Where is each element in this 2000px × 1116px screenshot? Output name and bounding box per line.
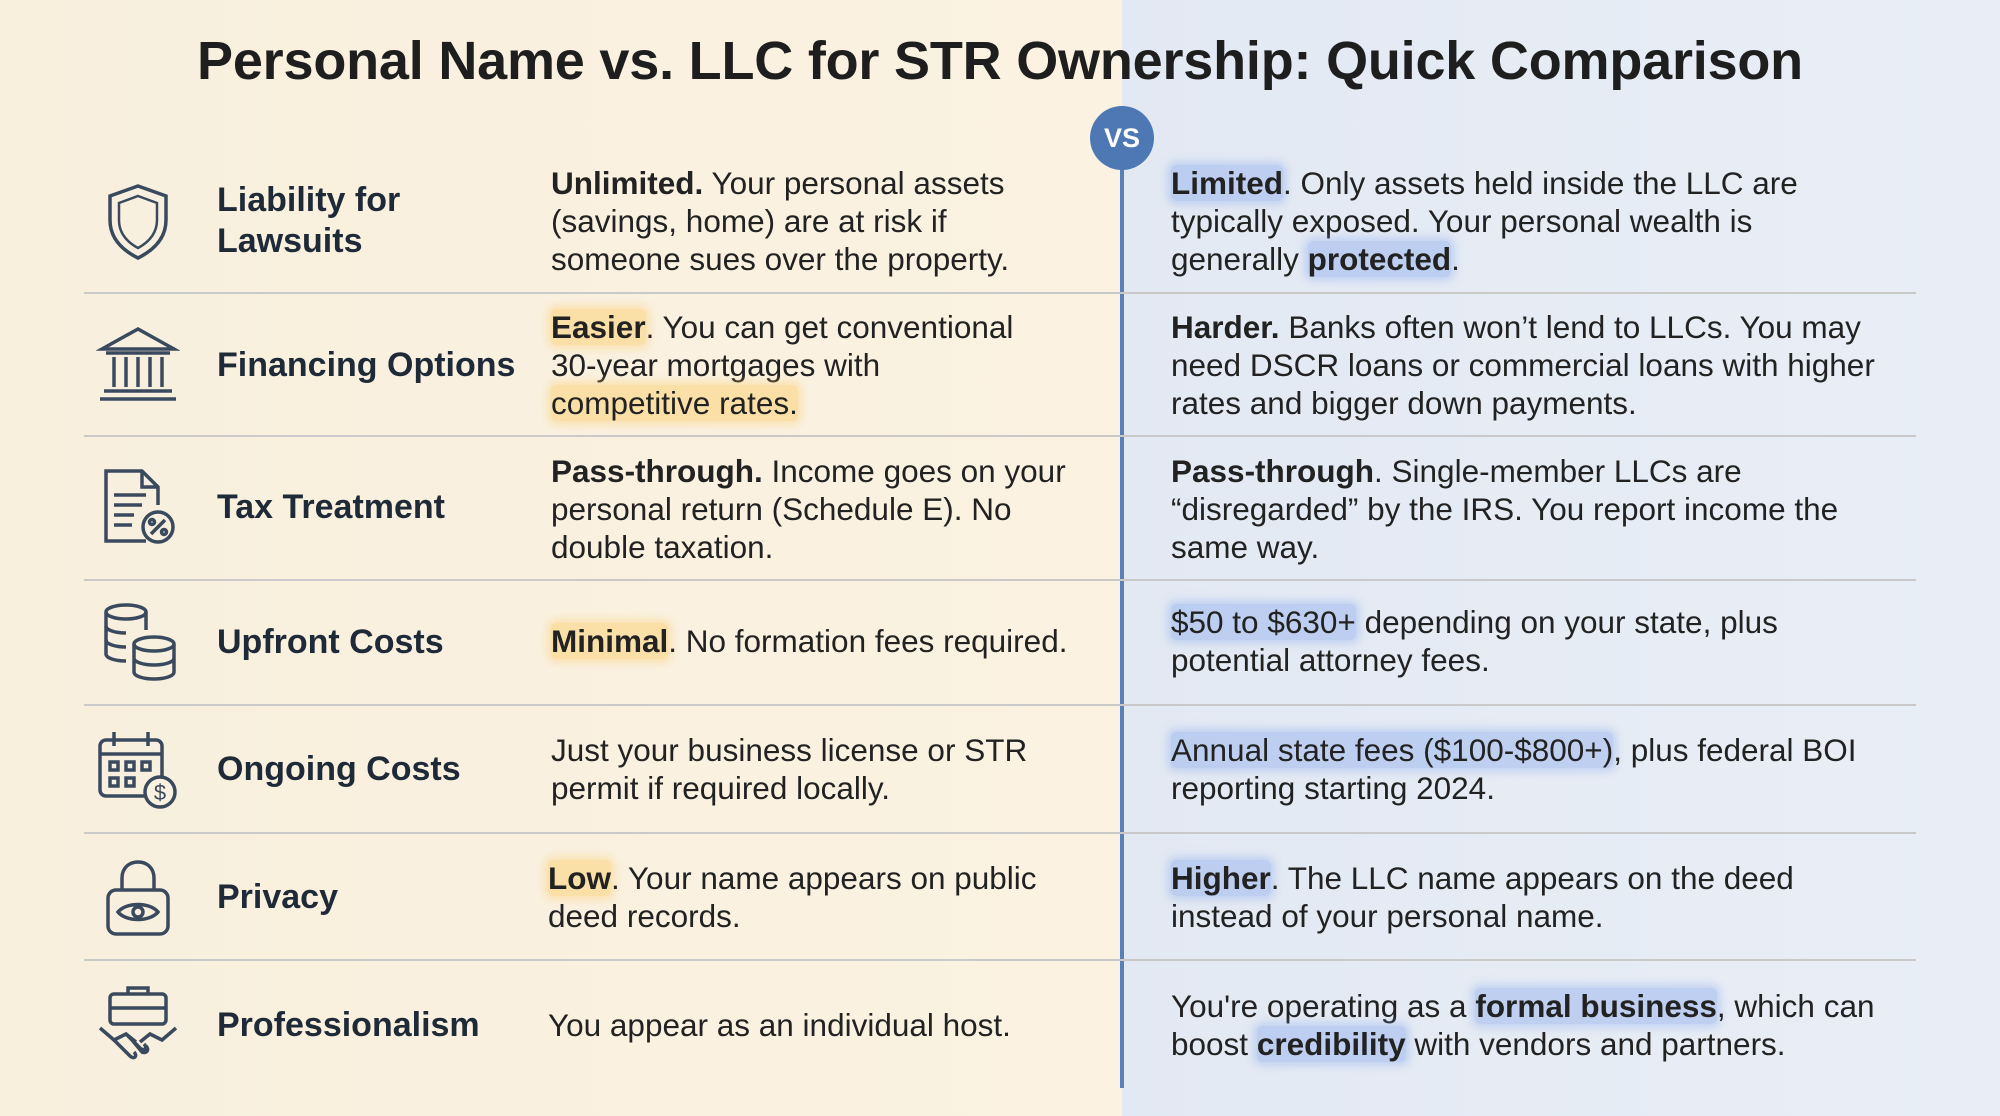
right text: [1171, 309, 1875, 421]
left text: [551, 732, 1027, 806]
left text: [544, 302, 1013, 428]
left text: personal return (Schedule E). No: [551, 491, 1012, 527]
row: privacy: [106, 852, 1794, 936]
right text: [1164, 158, 1798, 284]
left text: Minimal. No formation fees required.: [551, 623, 1067, 659]
right text: You're operating as a formal business, which can: [1171, 988, 1874, 1024]
right text: Annual state fees ($100-$800+), plus federal BOI: [1171, 732, 1857, 768]
icon: calendar dollar: [98, 732, 177, 809]
left text: Pass-through. Income goes on your: [551, 453, 1066, 489]
left text: Just your business license or STR: [551, 732, 1027, 768]
right text: [1171, 453, 1838, 565]
icon: bank: [96, 327, 180, 401]
left text: competitive rates.: [551, 385, 798, 421]
right text: [1164, 725, 1857, 806]
left text: [551, 165, 1009, 277]
right text: [1164, 597, 1778, 678]
row: ongoing: [98, 725, 1857, 809]
icon: calendar dollar: $: [154, 780, 166, 805]
left text: Unlimited. Your personal assets: [551, 165, 1004, 201]
left text: 30-year mortgages with: [551, 347, 880, 383]
right text: typically exposed. Your personal wealth is: [1171, 203, 1752, 239]
icon: coins: [104, 603, 176, 681]
label: Lawsuits: [217, 222, 362, 260]
left text: deed records.: [548, 898, 741, 934]
left text: Low. Your name appears on public: [548, 860, 1037, 896]
vs badge: VS: [1104, 123, 1140, 153]
right text: rates and bigger down payments.: [1171, 385, 1637, 421]
label: Financing Options: [217, 346, 515, 384]
label: Ongoing Costs: [217, 750, 461, 788]
row: financing: [96, 302, 1875, 428]
right text: boost credibility with vendors and partners.: [1171, 1026, 1786, 1062]
label: Professionalism: [217, 1006, 480, 1044]
center divider: [1120, 150, 1124, 1088]
right text: Limited. Only assets held inside the LLC are: [1171, 165, 1798, 201]
right text: same way.: [1171, 529, 1319, 565]
left text: You appear as an individual host.: [548, 1007, 1011, 1043]
right text: “disregarded” by the IRS. You report income the: [1171, 491, 1838, 527]
right text: need DSCR loans or commercial loans with higher: [1171, 347, 1875, 383]
right text: Higher. The LLC name appears on the deed: [1171, 860, 1794, 896]
right text: $50 to $630+ depending on your state, plus: [1171, 604, 1778, 640]
left text: (savings, home) are at risk if: [551, 203, 947, 239]
icon: padlock eye: [106, 860, 170, 936]
row: liability: [108, 158, 1798, 284]
left text: someone sues over the property.: [551, 241, 1009, 277]
left text: double taxation.: [551, 529, 773, 565]
right text: Harder. Banks often won’t lend to LLCs. You may: [1171, 309, 1861, 345]
left text: [540, 852, 1037, 934]
left text: permit if required locally.: [551, 770, 890, 806]
left text: Easier. You can get conventional: [551, 309, 1013, 345]
row: upfront: [104, 597, 1778, 681]
right text: reporting starting 2024.: [1171, 770, 1495, 806]
left text: [551, 453, 1066, 565]
right text: instead of your personal name.: [1171, 898, 1604, 934]
label: Liability for: [217, 181, 400, 219]
label: [217, 181, 400, 260]
title: Personal Name vs. LLC for STR Ownership: Quick Comparison: [197, 31, 1803, 91]
row: professionalism: [98, 981, 1874, 1069]
right text: Pass-through. Single-member LLCs are: [1171, 453, 1742, 489]
right text: potential attorney fees.: [1171, 642, 1490, 678]
right text: [1171, 981, 1874, 1069]
icon: shield: [108, 184, 168, 260]
right text: [1164, 853, 1794, 934]
label: Privacy: [217, 878, 338, 916]
label: Tax Treatment: [217, 488, 445, 526]
row: tax: [104, 453, 1838, 565]
label: Upfront Costs: [217, 623, 444, 661]
icon: briefcase handshake: [98, 986, 178, 1060]
vs badge: [1090, 106, 1154, 170]
right text: generally protected.: [1171, 241, 1460, 277]
icon: tax document: [104, 469, 175, 544]
